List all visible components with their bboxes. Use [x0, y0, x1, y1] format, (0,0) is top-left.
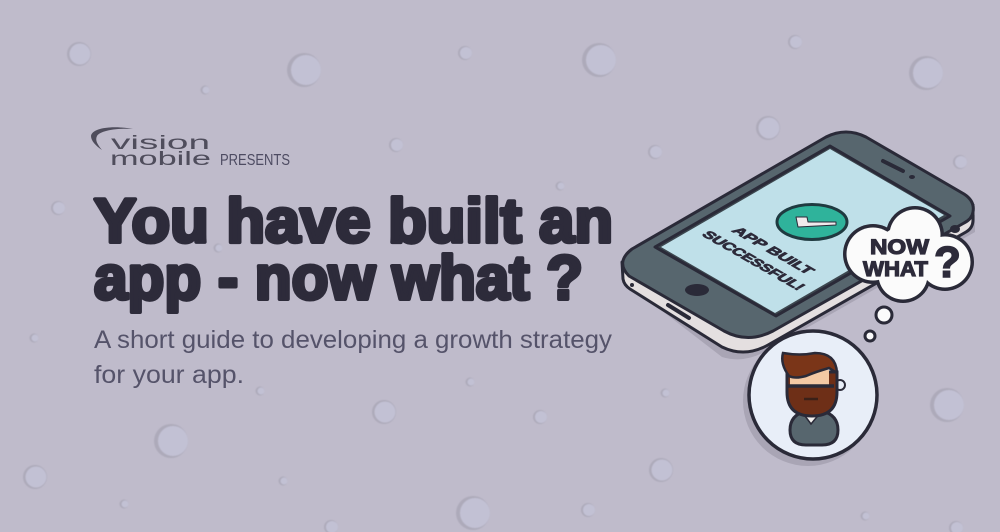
side port: [950, 225, 960, 233]
glasses band: [786, 384, 834, 388]
speaker: [883, 161, 903, 171]
subtitle: [94, 326, 613, 389]
screen message: APP BUILT: [728, 224, 819, 277]
logo wordmark: mobile: [110, 149, 211, 170]
VisionMobile logo: [91, 127, 211, 170]
cloud text: ?: [934, 238, 961, 287]
avatar circle: [749, 331, 877, 459]
title: You have built an: [94, 187, 613, 256]
cloud text: WHAT: [863, 258, 928, 281]
charging port: [668, 305, 689, 318]
logo wordmark: vision: [111, 133, 210, 154]
side dot: [630, 283, 634, 287]
camera: [909, 175, 915, 179]
thought dots: [865, 307, 892, 341]
body: [790, 411, 838, 445]
forehead: [790, 370, 829, 385]
screen: [661, 149, 944, 313]
presents label: PRESENTS: [220, 152, 290, 169]
phone body: [622, 205, 973, 352]
phone illustration: [622, 132, 975, 359]
screen message: SUCCESSFUL!: [698, 228, 809, 292]
cloud fill: [846, 210, 970, 300]
cloud outline: [843, 206, 974, 303]
subtitle: for your app.: [94, 361, 244, 389]
phone shadow: [622, 215, 975, 359]
cloud text: NOW: [870, 236, 929, 259]
logo wordmark: [110, 133, 211, 170]
phone face: [623, 132, 973, 338]
screen bezel band: [655, 146, 950, 316]
cloud text: [863, 236, 961, 287]
collar: [802, 408, 821, 424]
ear: [835, 380, 845, 390]
success check badge: [777, 204, 847, 240]
mouth: [804, 398, 818, 400]
title: app - now what ?: [94, 244, 583, 313]
avatar: [743, 331, 877, 466]
logo swoosh: [91, 127, 133, 150]
home button: [685, 284, 709, 296]
avatar shadow: [743, 336, 873, 466]
title: [94, 187, 613, 313]
thought bubble: [843, 206, 974, 341]
hair: [782, 353, 837, 378]
face: [787, 372, 837, 416]
subtitle: A short guide to developing a growth strategy: [94, 326, 613, 354]
